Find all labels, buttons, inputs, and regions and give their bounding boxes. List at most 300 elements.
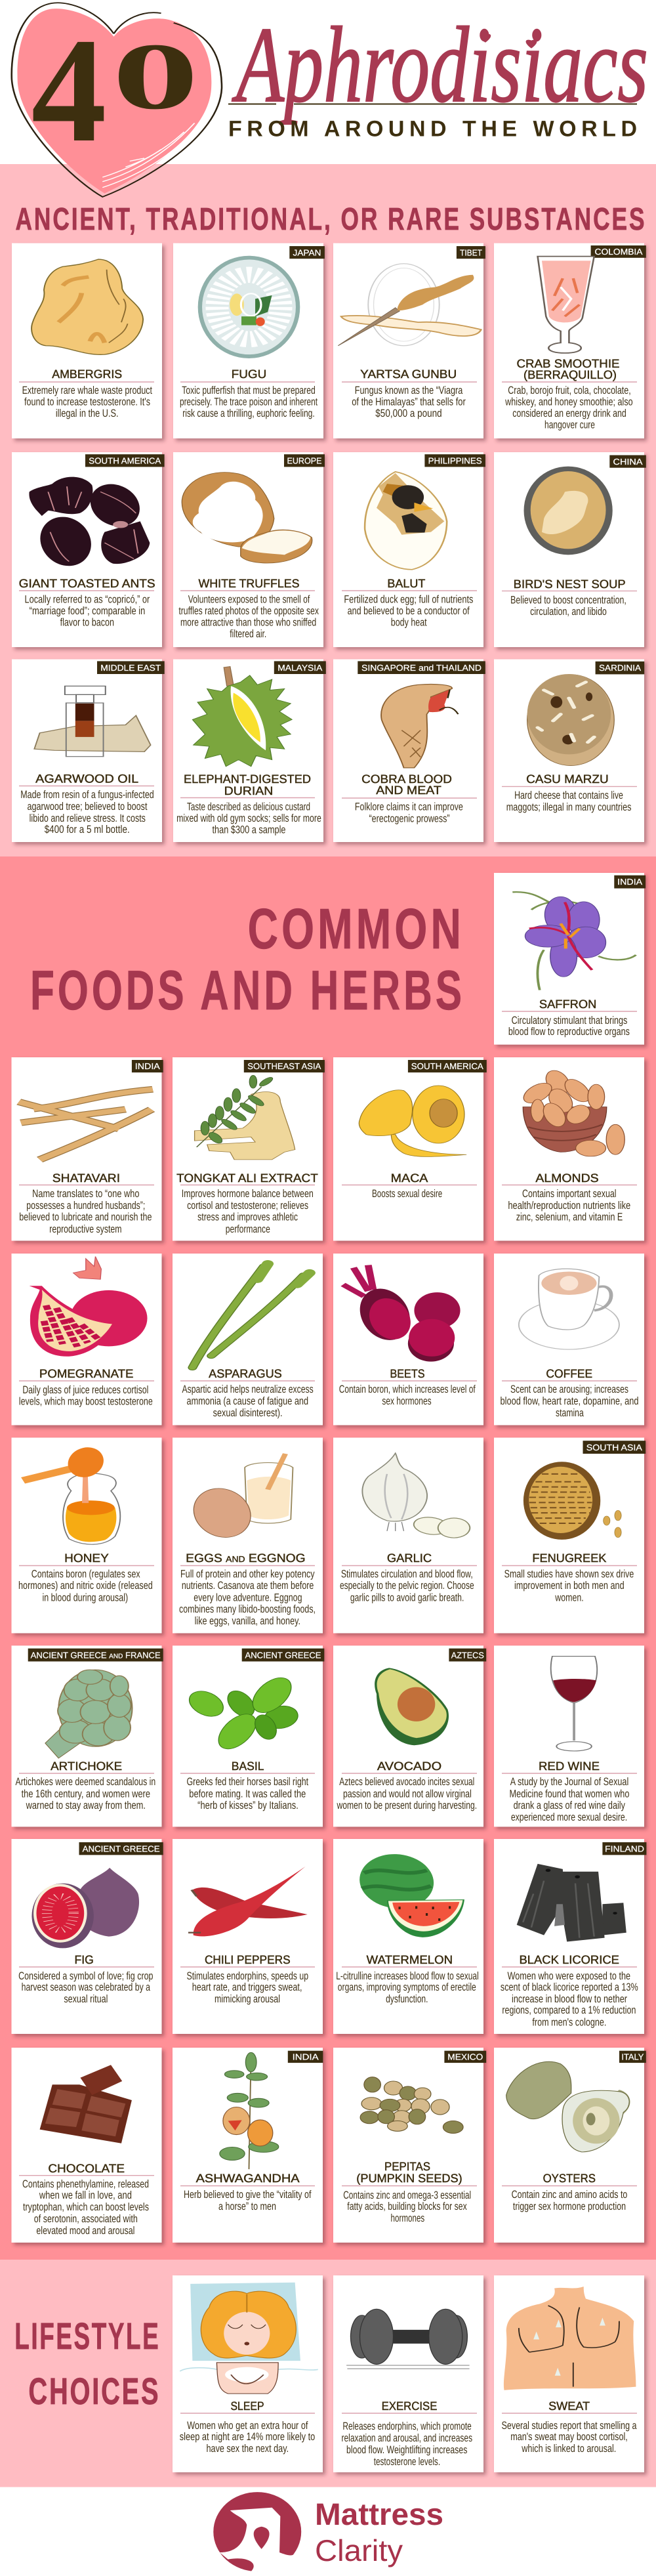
icon: avocado	[375, 1668, 449, 1745]
name: elephant-digested durian	[184, 772, 311, 797]
description: pomegranate: levels, which may boost testosterone	[19, 1396, 153, 1408]
description: chili peppers: heart rate, and triggers sweat,	[192, 1981, 302, 1993]
name: crab smoothie: CRAB SMOOTHIE	[517, 357, 619, 370]
description: sweat	[501, 2420, 637, 2455]
description: agarwood oil: libido and relieve stress. It costs	[30, 813, 146, 824]
card: almonds	[494, 1057, 644, 1240]
description: sleep	[180, 2420, 315, 2455]
card: cobra blood and meat	[333, 659, 485, 842]
description: coffee	[500, 1383, 639, 1419]
tag: Aztecs: AZTECS	[451, 1650, 484, 1660]
description: eggs and eggnog	[179, 1569, 316, 1627]
logo: Mattress Clarity	[213, 2492, 443, 2571]
description: basil	[186, 1776, 308, 1811]
subtitle: from around the world: FROM AROUND THE WORLD	[228, 117, 637, 142]
card: pomegranate	[12, 1254, 161, 1425]
tag: Mexico: MEXICO	[447, 2052, 483, 2062]
icon: pomegranate	[30, 1257, 148, 1357]
name: elephant-digested durian: DURIAN	[224, 784, 273, 797]
card: basil	[173, 1645, 324, 1826]
name: oysters: OYSTERS	[543, 2172, 596, 2185]
tag: Malaysia	[274, 661, 326, 674]
heading: lifestyle choices: LIFESTYLE	[14, 2315, 160, 2357]
description: giant toasted ants: Locally referred to as “copricó,” or	[25, 593, 150, 605]
card: saffron	[494, 873, 646, 1045]
tag: Sardinia	[596, 662, 644, 674]
description: fig: Considered a symbol of love; fig crop	[18, 1970, 154, 1982]
icon: sleeping woman	[180, 2283, 318, 2394]
description: basil: “herb of kisses” by Italians.	[197, 1800, 298, 1811]
icon: cobra	[381, 685, 458, 768]
icon: hearts over the letter i	[480, 34, 537, 49]
description: saffron	[508, 1015, 630, 1038]
tag: Southeast Asia: SOUTHEAST ASIA	[247, 1061, 321, 1071]
icon: logo mark	[213, 2492, 301, 2571]
name: honey: HONEY	[64, 1552, 109, 1565]
description: chocolate: of serotonin, associated with	[34, 2213, 138, 2225]
description: almonds	[508, 1188, 630, 1223]
tag: India: INDIA	[135, 1061, 160, 1071]
description: watermelon	[336, 1970, 479, 2005]
description: fugu	[180, 385, 318, 419]
description: white truffles: more attractive than those who sniffed	[180, 617, 316, 629]
name: pepitas (pumpkin seeds): PEPITAS	[384, 2160, 430, 2173]
name: pepitas (pumpkin seeds): (PUMPKIN SEEDS)	[356, 2172, 462, 2185]
name: sleep: SLEEP	[231, 2399, 264, 2413]
icon: garlic bulb	[362, 1453, 475, 1541]
description: tongkat ali extract: cortisol and testosterone; relieves	[187, 1200, 308, 1212]
card: maca	[333, 1057, 487, 1240]
card: ambergris	[12, 243, 162, 438]
name: garlic: GARLIC	[387, 1552, 432, 1565]
description: balut: and believed to be a conductor of	[348, 605, 470, 617]
description: tongkat ali extract: performance	[226, 1223, 270, 1235]
description: black licorice: from men's cologne.	[532, 2016, 606, 2028]
description: shatavari: reproductive system	[49, 1223, 122, 1235]
description: basil: before mating. It was called the	[189, 1788, 306, 1800]
card: balut	[333, 452, 485, 647]
description: fenugreek: improvement in both men and	[514, 1580, 625, 1592]
description: tongkat ali extract: stress and improves athletic	[197, 1212, 298, 1223]
icon: almonds bowl	[518, 1069, 625, 1156]
tag: Philippines	[424, 454, 485, 467]
logo wordmark: Clarity	[315, 2533, 403, 2567]
card: oysters	[494, 2048, 646, 2243]
name: almonds: ALMONDS	[535, 1172, 599, 1185]
description: red wine: drank a glass of red wine daily	[514, 1800, 626, 1811]
name: artichoke: ARTICHOKE	[51, 1760, 122, 1773]
description: balut: Fertilized duck egg; full of nutrients	[344, 593, 473, 605]
name: eggs and eggnog: EGGS AND EGGNOG	[186, 1552, 306, 1565]
description: casu marzu	[506, 790, 631, 813]
description: yartsa gunbu: of the Himalayas” that sells for	[352, 396, 466, 408]
description: avocado	[337, 1776, 477, 1811]
card: pepitas	[333, 2048, 486, 2243]
description: honey	[18, 1569, 153, 1604]
description: exercise: blood flow. Weightlifting increases	[346, 2444, 467, 2456]
description: balut	[344, 593, 473, 629]
description: yartsa gunbu: Fungus known as the “Viagra	[355, 385, 463, 396]
description: eggs and eggnog: combines many libido-boosting foods,	[179, 1603, 316, 1615]
icon: fugu plate	[198, 256, 300, 358]
description: chocolate: tryptophan, which can boost levels	[23, 2201, 149, 2213]
description: artichoke: warned to stay away from them.	[26, 1800, 146, 1811]
panel: lifestyle choices	[0, 2260, 656, 2487]
description: exercise: Releases endorphins, which promote	[342, 2420, 472, 2432]
name: saffron: SAFFRON	[539, 998, 596, 1011]
number: 40	[31, 8, 199, 173]
description: pepitas: hormones	[391, 2212, 424, 2224]
tag: Colombia	[591, 245, 646, 258]
description: agarwood oil: agarwood tree; believed to boost	[28, 801, 148, 813]
name: chili peppers: CHILI PEPPERS	[205, 1953, 291, 1966]
icon: egg and eggnog glass	[188, 1454, 293, 1540]
description: sleep: sleep at night are 14% more likely to	[180, 2431, 315, 2443]
description: agarwood oil: $400 for a 5 ml bottle.	[45, 824, 130, 835]
description: coffee: stamina	[556, 1407, 584, 1419]
icon: sweaty torso	[504, 2287, 636, 2390]
tag: Italy: ITALY	[621, 2052, 644, 2062]
name: cobra blood and meat: COBRA BLOOD	[361, 772, 452, 786]
description: chili peppers: mimicking arousal	[215, 1993, 280, 2005]
name: ambergris: AMBERGRIS	[52, 368, 122, 381]
tag: Aztecs	[449, 1649, 486, 1662]
tag: India	[132, 1060, 163, 1072]
card: yartsa gunbu	[333, 243, 485, 438]
icon: white truffles	[182, 473, 312, 563]
tag: South America: SOUTH AMERICA	[411, 1061, 483, 1071]
icon: saffron flower	[512, 892, 636, 990]
description: pepitas	[343, 2189, 471, 2224]
description: artichoke: the 16th century, and women were	[22, 1788, 150, 1800]
description: watermelon: organs, improving symptoms of erectile	[338, 1981, 476, 1993]
icon: balut egg	[365, 472, 447, 570]
description: giant toasted ants	[25, 593, 150, 629]
card: tongkat ali extract	[173, 1057, 325, 1240]
tag: Ancient Greece	[79, 1842, 163, 1855]
heading: common foods and herbs	[30, 897, 465, 1022]
tag: Singapore and Thailand	[358, 661, 485, 674]
description: ashwagandha: a horse” to men	[218, 2201, 276, 2212]
description: asparagus: Aspartic acid helps neutralize excess	[182, 1383, 314, 1395]
description: shatavari: possesses a hundred husbands”;	[26, 1200, 145, 1212]
name: coffee: COFFEE	[546, 1367, 592, 1380]
number: 40: 0	[112, 24, 199, 129]
icon: ashwagandha plant	[220, 2052, 279, 2169]
description: elephant-digested durian: mixed with old gym socks; sells for more	[176, 813, 321, 824]
description: watermelon: dysfunction.	[386, 1993, 428, 2005]
description: asparagus	[182, 1383, 314, 1419]
tag: India	[288, 2051, 323, 2063]
description: fenugreek: women.	[555, 1592, 584, 1604]
icon: shatavari roots	[19, 1089, 153, 1160]
header: 40 aphrodisiacs title	[12, 3, 648, 197]
description: fugu: risk cause a thrilling, euphoric feeling.	[182, 408, 315, 419]
tag: Finland: FINLAND	[605, 1844, 644, 1853]
name: chocolate: CHOCOLATE	[48, 2162, 125, 2175]
tag: South America: SOUTH AMERICA	[89, 455, 161, 466]
icon: yartsa gunbu	[338, 264, 481, 346]
heading: lifestyle choices: CHOICES	[28, 2371, 160, 2413]
name: white truffles: WHITE TRUFFLES	[198, 577, 299, 590]
description: elephant-digested durian: than $300 a sample	[213, 824, 286, 836]
icon: maca	[359, 1086, 466, 1156]
card: red wine	[494, 1645, 644, 1826]
description: ambergris	[22, 385, 152, 419]
name: asparagus: ASPARAGUS	[209, 1367, 282, 1380]
tag: South Asia	[583, 1441, 646, 1454]
description: white truffles	[178, 593, 319, 640]
tag: Finland	[602, 1842, 646, 1855]
description: beets: sex hormones	[382, 1395, 432, 1407]
name: crab smoothie: (BERRAQUILLO)	[523, 368, 617, 381]
icon: fenugreek bowl	[523, 1462, 621, 1540]
name: fugu: FUGU	[232, 368, 266, 381]
card: watermelon	[333, 1839, 483, 2034]
name: tongkat ali extract: TONGKAT ALI EXTRACT	[176, 1172, 318, 1185]
icon: coffee cup	[519, 1269, 619, 1349]
description: agarwood oil: Made from resin of a fungus-infected	[20, 789, 154, 801]
tag: India: INDIA	[293, 2052, 319, 2062]
name: yartsa gunbu: YARTSA GUNBU	[360, 368, 457, 381]
tag: South Asia: SOUTH ASIA	[586, 1443, 642, 1452]
description: garlic: garlic pills to avoid garlic breath.	[350, 1592, 464, 1604]
card: casu marzu	[494, 659, 644, 842]
name: giant toasted ants: GIANT TOASTED ANTS	[19, 577, 155, 590]
description: pomegranate: Daily glass of juice reduces cortisol	[22, 1384, 148, 1396]
description: yartsa gunbu: $50,000 a pound	[375, 408, 442, 419]
card: elephant-digested durian	[173, 659, 326, 842]
description: pepitas: fatty acids, building blocks for sex	[347, 2201, 467, 2212]
tag: India	[614, 876, 646, 889]
description: maca: Boosts sexual desire	[372, 1188, 442, 1200]
description: basil: Greeks fed their horses basil right	[186, 1776, 308, 1788]
card: chocolate	[12, 2048, 161, 2243]
description: asparagus: sexual disinterest).	[213, 1407, 283, 1419]
description: asparagus: ammonia (a cause of fatigue and	[186, 1395, 308, 1407]
icon: artichoke	[45, 1670, 133, 1758]
description: bird's nest soup: circulation, and libido	[530, 606, 607, 618]
description: exercise: testosterone levels.	[374, 2456, 440, 2468]
card: exercise	[333, 2275, 483, 2472]
description: shatavari	[19, 1188, 152, 1235]
description: garlic	[340, 1569, 474, 1604]
tag: Mexico	[444, 2051, 486, 2063]
icon: honey jar and dipper	[23, 1446, 120, 1544]
card: garlic	[333, 1437, 483, 1633]
description: artichoke	[16, 1776, 155, 1811]
logo wordmark: Mattress	[315, 2497, 443, 2531]
card: beets	[333, 1254, 483, 1425]
tag: Middle East: MIDDLE EAST	[100, 663, 161, 673]
card: crab smoothie	[494, 243, 646, 438]
number: 40: 4	[31, 8, 106, 173]
name: pepitas (pumpkin seeds)	[356, 2160, 462, 2185]
name: exercise: EXERCISE	[382, 2399, 437, 2413]
name: crab smoothie	[517, 357, 619, 381]
description: avocado: women to be present during harvesting.	[337, 1800, 477, 1811]
icon: fig	[31, 1868, 139, 1948]
card: fig	[12, 1839, 163, 2034]
description: honey: Contains boron (regulates sex	[31, 1569, 140, 1580]
description: fig	[18, 1970, 154, 2005]
description: white truffles: filtered air.	[230, 628, 266, 640]
icon: asparagus	[192, 1264, 310, 1368]
tag: China	[609, 455, 646, 468]
card: fenugreek	[494, 1437, 646, 1633]
name: cobra blood and meat	[361, 772, 452, 797]
icon: black licorice	[517, 1864, 626, 1942]
card: avocado	[333, 1645, 486, 1826]
tag: Philippines: PHILIPPINES	[428, 455, 482, 466]
card: agarwood oil	[12, 659, 165, 842]
name: ashwagandha: ASHWAGANDHA	[196, 2172, 300, 2185]
icon: beets	[343, 1265, 461, 1362]
description: red wine	[509, 1776, 630, 1823]
description: fig: sexual ritual	[64, 1993, 108, 2005]
name: fenugreek: FENUGREEK	[532, 1552, 606, 1565]
icon: chili peppers	[188, 1867, 308, 1936]
tag: Europe	[284, 454, 325, 467]
description: oysters	[512, 2189, 627, 2212]
icon: pumpkin seeds	[360, 2077, 463, 2133]
tag: Tibet	[457, 246, 485, 259]
tag: Sardinia: SARDINIA	[599, 663, 641, 673]
icon: dumbbell	[346, 2309, 470, 2369]
tag: India: INDIA	[617, 877, 643, 887]
icon: ambergris	[31, 259, 143, 354]
name: beets: BEETS	[390, 1367, 425, 1380]
card: sweat	[494, 2275, 644, 2472]
description: eggs and eggnog: every love adventure. Eggnog	[194, 1592, 302, 1604]
name: fig: FIG	[75, 1953, 94, 1966]
icon: red wine glass	[551, 1657, 597, 1751]
icon: chocolate bar	[40, 2065, 132, 2143]
description: fenugreek	[504, 1569, 634, 1604]
icon: crab smoothie glass	[538, 257, 594, 353]
description: almonds: zinc, selenium, and vitamin E	[516, 1212, 623, 1223]
description: exercise	[341, 2420, 472, 2468]
description: watermelon: L-citrulline increases blood flow to sexual	[336, 1970, 479, 1982]
icon: tongkat ali root	[195, 1075, 295, 1160]
description: chili peppers	[186, 1970, 308, 2005]
name: cobra blood and meat: AND MEAT	[376, 784, 441, 797]
description: crab smoothie: hangover cure	[544, 419, 595, 431]
logo wordmark	[315, 2497, 443, 2567]
description: white truffles: Volunteers exposed to the smell of	[188, 593, 310, 605]
card: honey	[12, 1437, 161, 1633]
description: garlic: Stimulates circulation and blood flow,	[341, 1569, 473, 1580]
description: pomegranate	[19, 1384, 153, 1408]
description: tongkat ali extract: Improves hormone balance between	[182, 1188, 314, 1200]
description: beets	[339, 1383, 476, 1407]
description: giant toasted ants: “marriage food”; comparable in	[30, 605, 145, 617]
icon: bird's nest soup	[524, 467, 613, 555]
tag: Singapore and Thailand: SINGAPORE and THAILAND	[361, 663, 482, 673]
tag: Ancient Greece	[242, 1649, 324, 1662]
card: artichoke	[12, 1645, 163, 1826]
description: fig: harvest season was celebrated by a	[22, 1981, 151, 1993]
description: shatavari: Name translates to “one who	[32, 1188, 139, 1200]
heading: lifestyle choices	[14, 2315, 160, 2413]
tag: Tibet: TIBET	[460, 247, 482, 257]
description: beets: Contain boron, which increases level of	[339, 1383, 476, 1395]
tag: Europe: EUROPE	[287, 455, 322, 466]
icon: oysters	[506, 2061, 630, 2152]
name: pomegranate: POMEGRANATE	[39, 1367, 133, 1380]
tag: Japan	[289, 246, 325, 259]
card: bird's nest soup	[494, 452, 646, 647]
name: sweat: SWEAT	[548, 2399, 590, 2413]
card: white truffles	[173, 452, 325, 647]
name: bird's nest soup: BIRD'S NEST SOUP	[514, 578, 626, 591]
description: ambergris: illegal in the U.S.	[56, 408, 119, 419]
name: avocado: AVOCADO	[377, 1760, 441, 1773]
tag: Middle East	[97, 661, 165, 674]
description: chocolate: elevated mood and arousal	[36, 2225, 134, 2237]
name: basil: BASIL	[232, 1760, 264, 1773]
card: coffee	[494, 1254, 644, 1425]
description: yartsa gunbu	[352, 385, 466, 419]
tag: Japan: JAPAN	[293, 247, 321, 257]
description: ashwagandha	[184, 2189, 312, 2212]
name: shatavari: SHATAVARI	[52, 1172, 120, 1185]
description: avocado: passion and would not allow virginal	[343, 1788, 472, 1800]
description: balut: body heat	[391, 617, 427, 629]
description: artichoke: Artichokes were deemed scandalous in	[16, 1776, 155, 1788]
description: shatavari: believed to lubricate and nourish the	[19, 1212, 152, 1223]
description: black licorice	[501, 1970, 638, 2028]
description: eggs and eggnog: nutrients. Casanova ate them before	[182, 1580, 314, 1592]
description: tongkat ali extract	[182, 1188, 314, 1235]
icon: casu marzu cheese	[527, 674, 614, 766]
description: casu marzu: Hard cheese that contains live	[514, 790, 623, 801]
tag: Colombia: COLOMBIA	[594, 247, 643, 257]
name: casu marzu: CASU MARZU	[526, 772, 609, 786]
description: sleep: Women who get an extra hour of	[187, 2420, 308, 2432]
icon: heart	[12, 3, 222, 197]
icon: agarwood oil	[34, 686, 151, 757]
description: almonds: Contains important sexual	[522, 1188, 617, 1200]
description: ambergris: found to increase testosterone. It's	[24, 396, 150, 408]
description: chocolate	[22, 2178, 149, 2237]
description: crab smoothie	[504, 385, 633, 431]
icon: durian	[192, 667, 292, 767]
name: watermelon: WATERMELON	[367, 1953, 453, 1966]
description: avocado: Aztecs believed avocado incites sexual	[339, 1776, 474, 1788]
icon: basil leaves	[182, 1674, 304, 1752]
name: balut: BALUT	[387, 577, 425, 590]
description: elephant-digested durian	[176, 801, 321, 836]
description: pepitas: Contains zinc and omega-3 essential	[343, 2189, 471, 2201]
card: eggs and eggnog	[173, 1437, 323, 1633]
card: asparagus	[173, 1254, 323, 1425]
card: giant toasted ants	[12, 452, 165, 647]
description: chocolate: Contains phenethylamine, released	[22, 2178, 149, 2190]
description: eggs and eggnog: Full of protein and other key potency	[180, 1569, 315, 1580]
description: honey: in blood during arousal)	[42, 1592, 128, 1604]
description: bird's nest soup	[510, 594, 626, 618]
name: maca: MACA	[391, 1172, 428, 1185]
description: cobra blood and meat: Folklore claims it can improve	[355, 801, 463, 813]
description: sweat: which is linked to arousal.	[522, 2443, 616, 2455]
description: cobra blood and meat	[355, 801, 463, 824]
name: black licorice: BLACK LICORICE	[520, 1953, 619, 1966]
description: ambergris: Extremely rare whale waste product	[22, 385, 152, 396]
description: fugu: Toxic pufferfish that must be prepared	[182, 385, 316, 396]
name: red wine: RED WINE	[539, 1760, 600, 1773]
icon: toasted ants	[29, 477, 150, 568]
